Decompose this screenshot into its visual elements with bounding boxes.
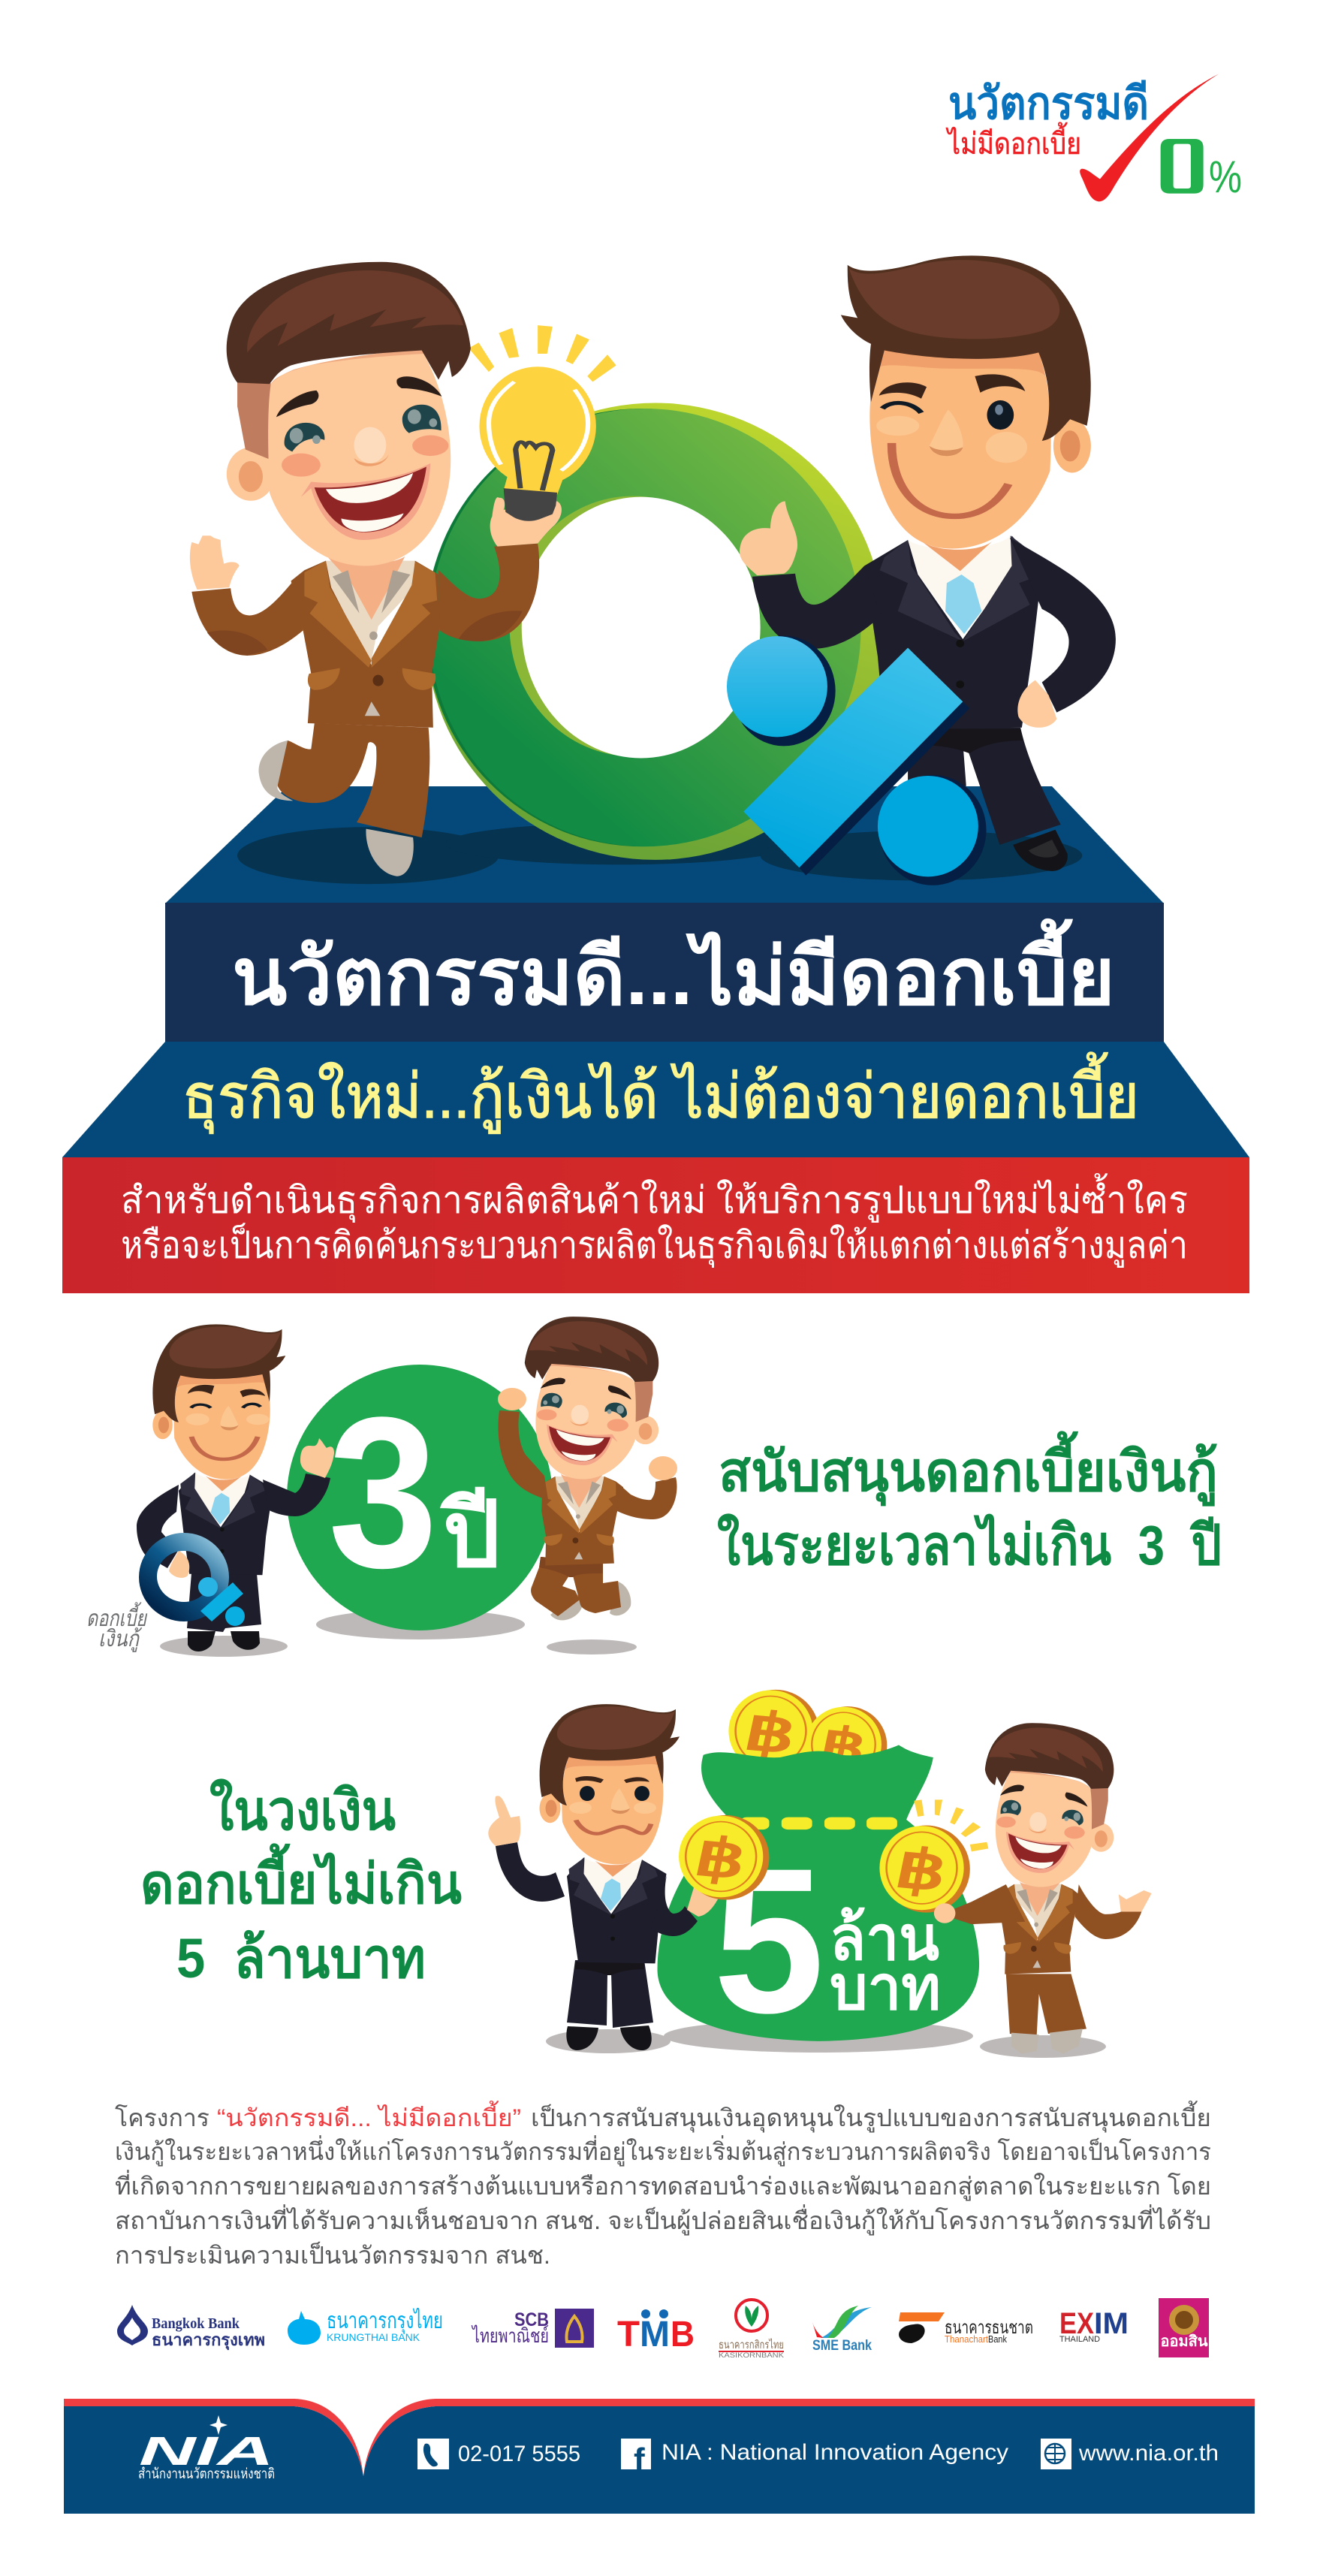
NIA logo bbox=[138, 2415, 275, 2482]
mini ring and percent bbox=[139, 1533, 245, 1626]
OK hand bbox=[300, 1438, 334, 1478]
text: สนับสนุนดอกเบี้ยเงินกู้ ในระยะเวลาไม่เกิน 3 ปี: ในระยะเวลาไม่เกิน 3 ปี bbox=[717, 1513, 1222, 1576]
logo: SCB: SCB bbox=[514, 2309, 549, 2330]
logo: Krungthai Bank: KRUNGTHAI BANK bbox=[327, 2331, 420, 2343]
OK arm and holding arm bbox=[137, 1474, 330, 1568]
pointing hand bbox=[488, 1796, 520, 1846]
front coin bbox=[679, 1815, 769, 1900]
caption: ดอกเบี้ย เงินกู้ bbox=[86, 1602, 148, 1652]
contact: phone: 02-017 5555 bbox=[458, 2442, 580, 2466]
text block: project description: “นวัตกรรมดี... ไม่มีดอกเบี้ย” bbox=[217, 2101, 521, 2131]
percent sign bbox=[727, 635, 987, 885]
logo: SCB: ไทยพาณิชย์ bbox=[471, 2324, 549, 2347]
contact: facebook: f bbox=[634, 2442, 645, 2478]
logo: EXIM Thailand: THAILAND bbox=[1059, 2335, 1100, 2344]
logo: SCB bbox=[471, 2309, 594, 2348]
logo: Kasikornbank: ธนาคารกสิกรไทย bbox=[719, 2338, 784, 2351]
contact: phone bbox=[417, 2439, 580, 2469]
logo: TMB: B bbox=[671, 2315, 695, 2354]
contact: facebook bbox=[621, 2439, 1008, 2478]
contact: website: www.nia.or.th bbox=[1078, 2441, 1219, 2466]
brown man jumping bbox=[498, 1317, 677, 1620]
logo: นวัตกรรมดี ไม่มีดอกเบี้ย 0%: ไม่มีดอกเบี้ย bbox=[945, 122, 1081, 161]
caption: ดอกเบี้ย เงินกู้: เงินกู้ bbox=[98, 1627, 143, 1652]
navy man pointing bbox=[488, 1704, 769, 2050]
text block: project description: การประเมินความเป็นนวัตกรรมจาก สนช. bbox=[115, 2241, 550, 2269]
text block: project description bbox=[115, 2101, 1211, 2269]
text: ในวงเงิน ดอกเบี้ยไม่เกิน 5 ล้านบาท bbox=[140, 1778, 462, 1989]
panel: main title bbox=[165, 903, 1164, 1042]
NIA logo: สำนักงานนวัตกรรมแห่งชาติ bbox=[138, 2466, 275, 2482]
logo: GSB ออมสิน: ออมสิน bbox=[1160, 2333, 1208, 2350]
logo: นวัตกรรมดี ไม่มีดอกเบี้ย 0%: % bbox=[1209, 152, 1242, 202]
panel: red description: สำหรับดำเนินธุรกิจการผลิตสินค้าใหม่ ให้บริการรูปแบบใหม่ไม่ซ้ำใคร bbox=[121, 1173, 1188, 1223]
logo: SME Bank bbox=[812, 2306, 872, 2354]
logo: Bangkok Bank bbox=[117, 2305, 265, 2351]
panel: red description bbox=[62, 1157, 1249, 1293]
panel: subtitle: ธุรกิจใหม่...กู้เงินได้ ไม่ต้องจ่ายดอกเบี้ย bbox=[182, 1052, 1139, 1134]
hero illustration bbox=[190, 255, 1116, 885]
green circle with 3 ปี: ปี bbox=[440, 1483, 500, 1585]
logo: Kasikornbank bbox=[719, 2300, 784, 2359]
text: ในวงเงิน ดอกเบี้ยไม่เกิน 5 ล้านบาท: ในวงเงิน bbox=[209, 1778, 396, 1842]
arms bbox=[191, 544, 539, 656]
holding hand bbox=[687, 1885, 719, 1917]
platform shadows bbox=[237, 823, 1082, 884]
money bag bbox=[658, 1690, 979, 2041]
platform top bbox=[165, 786, 1164, 903]
panel: red description: หรือจะเป็นการคิดค้นกระบวนการผลิตในธุรกิจเดิมให้แตกต่างแต่สร้างมูลค่า bbox=[121, 1223, 1188, 1268]
shadows bbox=[546, 2019, 1106, 2058]
logo: นวัตกรรมดี ไม่มีดอกเบี้ย 0% bbox=[945, 74, 1242, 202]
text: สนับสนุนดอกเบี้ยเงินกู้ ในระยะเวลาไม่เกิน 3 ปี: สนับสนุนดอกเบี้ยเงินกู้ bbox=[719, 1431, 1218, 1507]
logo: Thanachart Bank: ธนาคารธนชาต bbox=[945, 2318, 1033, 2338]
coins behind bag bbox=[728, 1690, 887, 1784]
panel: subtitle bbox=[62, 1042, 1249, 1157]
logo: Bangkok Bank: ธนาคารกรุงเทพ bbox=[152, 2330, 265, 2351]
bag text: 5 ล้านบาท: 5 bbox=[713, 1826, 824, 2056]
text block: project description: โครงการ bbox=[115, 2104, 209, 2131]
panel: main title: นวัตกรรมดี...ไม่มีดอกเบี้ย bbox=[232, 918, 1115, 1021]
contact: website bbox=[1041, 2439, 1219, 2469]
logo: นวัตกรรมดี ไม่มีดอกเบี้ย 0%: นวัตกรรมดี bbox=[948, 78, 1149, 128]
logo: Thanachart Bank: Thanachart bbox=[945, 2333, 988, 2345]
text: ในวงเงิน ดอกเบี้ยไม่เกิน 5 ล้านบาท: 5 ล้านบาท bbox=[176, 1927, 426, 1989]
logo: Krungthai Bank bbox=[288, 2307, 443, 2345]
bag text: 5 ล้านบาท bbox=[713, 1826, 941, 2056]
text: สนับสนุนดอกเบี้ยเงินกู้ ในระยะเวลาไม่เกิน 3 ปี bbox=[717, 1431, 1222, 1576]
contact: facebook: NIA : National Innovation Agency bbox=[662, 2440, 1008, 2465]
green circle with 3 ปี: 3 bbox=[328, 1372, 438, 1612]
logo: Thanachart Bank: Bank bbox=[988, 2333, 1007, 2345]
legs bbox=[278, 723, 429, 837]
logo: TMB bbox=[617, 2309, 695, 2354]
shoes bbox=[259, 741, 414, 876]
footer band bbox=[64, 2399, 1255, 2514]
logo: EXIM Thailand: IM bbox=[1094, 2307, 1129, 2340]
man in brown suit bbox=[190, 262, 562, 876]
text block: project description: เป็นการสนับสนุนเงินอุดหนุนในรูปแบบของการสนับสนุนดอกเบี้ย bbox=[531, 2101, 1211, 2133]
text block: project description: ที่เกิดจากการขยายผลของการสร้างต้นแบบหรือการทดสอบนำร่องและพัฒนาออกสู่ตลาดในระยะแรก โดย bbox=[115, 2170, 1211, 2201]
hands bbox=[190, 535, 240, 590]
logo: Krungthai Bank: ธนาคารกรุงไทย bbox=[327, 2307, 443, 2335]
caption: ดอกเบี้ย เงินกู้: ดอกเบี้ย bbox=[86, 1602, 148, 1631]
light bulb bbox=[469, 325, 616, 495]
text block: project description: สถาบันการเงินที่ได้รับความเห็นชอบจาก สนช. จะเป็นผู้ปล่อยสินเชื่อเงินกู้ให้กับโครงการนวัตกรรมที่ได้รับ bbox=[115, 2204, 1211, 2236]
man in navy suit bbox=[740, 255, 1116, 871]
text: ในวงเงิน ดอกเบี้ยไม่เกิน 5 ล้านบาท: ดอกเบี้ยไม่เกิน bbox=[140, 1843, 462, 1915]
logo: Bangkok Bank: Bangkok Bank bbox=[152, 2315, 240, 2332]
section: 5 million illustration bbox=[488, 1690, 1152, 2058]
bag text: 5 ล้านบาท: บาท bbox=[830, 1954, 941, 2022]
logo: TMB: M bbox=[640, 2315, 670, 2354]
green circle with 3 ปี bbox=[160, 1365, 637, 1657]
NIA logo: NIA bbox=[139, 2429, 274, 2474]
brown man with coin bbox=[879, 1723, 1152, 2053]
bank logos row bbox=[117, 2298, 1209, 2359]
green zero ring bbox=[426, 403, 885, 860]
text block: project description: เงินกู้ในระยะเวลาหนึ่งให้แก่โครงการนวัตกรรมที่อยู่ในระยะเริ่มต้นสู่กระบวนการผลิตจริง โดยอาจเป็นโครงการ bbox=[115, 2135, 1211, 2167]
logo: SME Bank: SME Bank bbox=[812, 2338, 872, 2354]
section: 3 years illustration bbox=[86, 1317, 677, 1657]
navy man with OK sign bbox=[137, 1324, 334, 1651]
bag text: 5 ล้านบาท: ล้าน bbox=[830, 1905, 939, 1973]
bulb base bbox=[504, 488, 557, 521]
logo: TMB: T bbox=[617, 2315, 640, 2354]
logo: EXIM Thailand: EX bbox=[1059, 2307, 1094, 2340]
logo: GSB ออมสิน bbox=[1159, 2298, 1209, 2357]
logo: EXIM Thailand bbox=[1059, 2307, 1129, 2344]
logo: Thanachart Bank bbox=[899, 2312, 1033, 2345]
logo: Kasikornbank: KASIKORNBANK bbox=[719, 2351, 784, 2359]
arms bbox=[496, 1842, 698, 1936]
